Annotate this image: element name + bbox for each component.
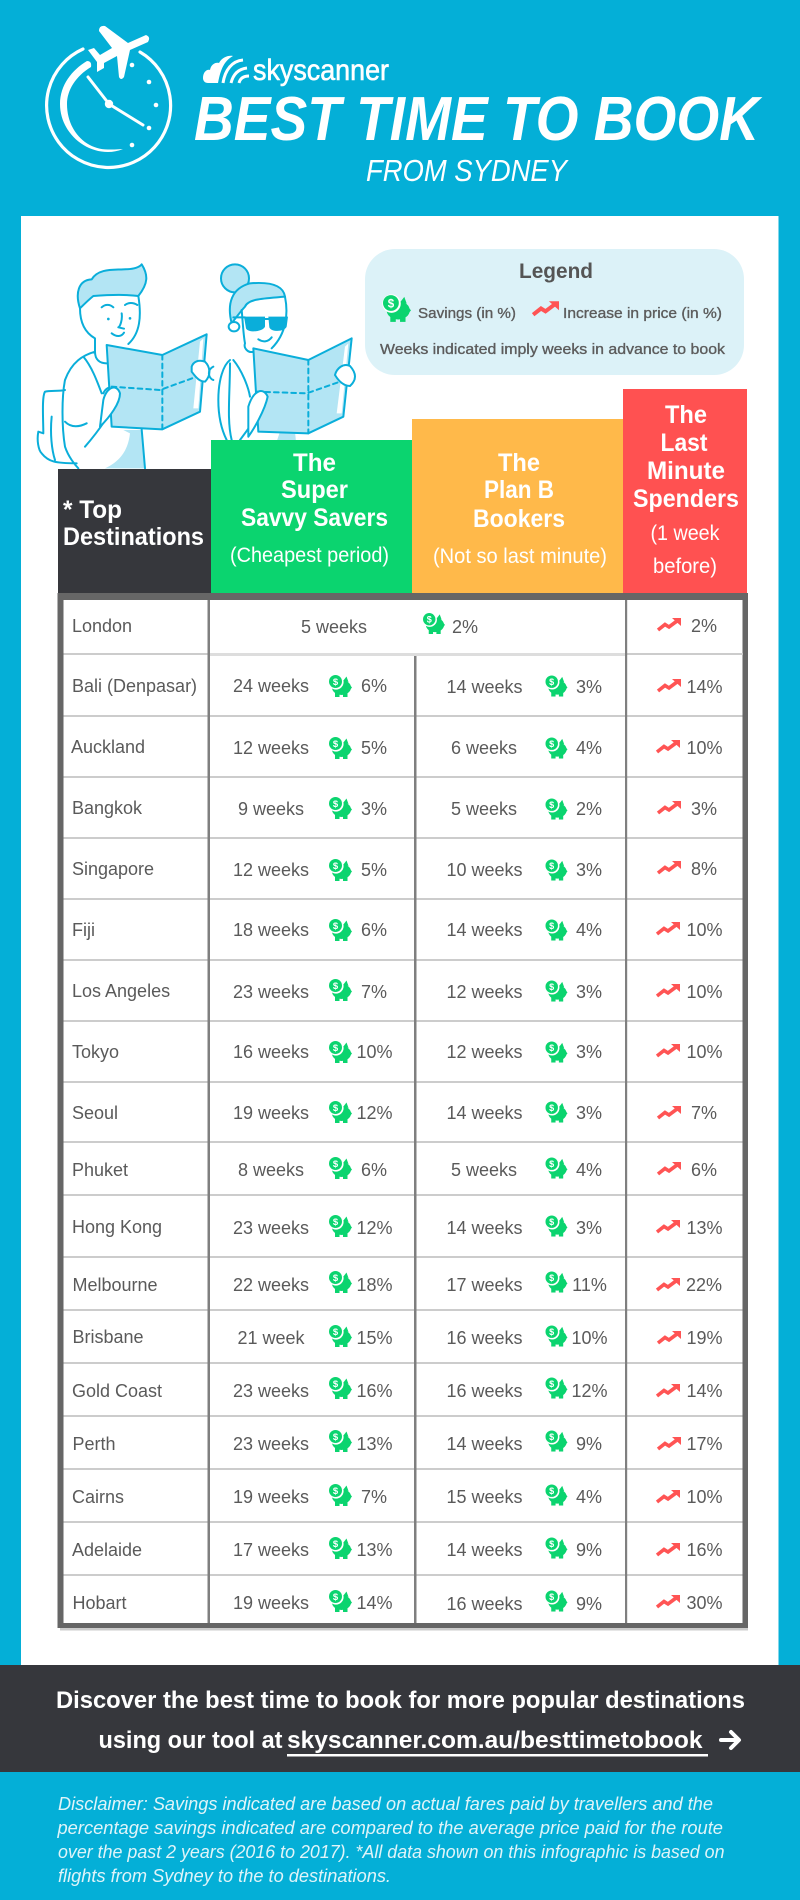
row: Adelaide (72, 1536, 723, 1560)
row: Fiji: 18 weeks (233, 920, 309, 940)
row: Cairns: 4% (576, 1487, 602, 1507)
row: Tokyo: 3% (576, 1042, 602, 1062)
disclaimer (56, 1794, 724, 1886)
row: Tokyo (72, 1040, 723, 1063)
row: Bangkok: 5 weeks (451, 799, 517, 819)
icon: clock with plane (47, 26, 171, 167)
disclaimer: percentage savings indicated are compared to the average price paid for the route (56, 1818, 723, 1838)
call to action band (0, 1665, 800, 1772)
column header: last minute spenders: before) (653, 555, 717, 578)
row: Phuket: Phuket (72, 1160, 128, 1180)
row: Los Angeles (72, 978, 723, 1002)
column header: super savvy savers: The (293, 449, 336, 477)
row: Brisbane: Brisbane (72, 1327, 144, 1347)
row: Brisbane: 10% (571, 1328, 608, 1348)
row: Gold Coast: 16% (356, 1381, 393, 1401)
row: Gold Coast (72, 1376, 723, 1401)
disclaimer: Disclaimer: Savings indicated are based on actual fares paid by travellers and the (58, 1794, 713, 1814)
row: Adelaide: 16% (686, 1540, 723, 1560)
row: Bali: 6% (361, 676, 387, 696)
row: Phuket: 6% (361, 1160, 387, 1180)
row: Gold Coast: 14% (686, 1381, 723, 1401)
column header: plan b bookers: (Not so last minute) (433, 545, 607, 568)
row: Melbourne: Melbourne (72, 1275, 158, 1295)
row: Melbourne: 11% (572, 1275, 607, 1295)
row: Auckland: 6 weeks (451, 738, 517, 758)
row: Perth: 23 weeks (233, 1434, 309, 1454)
skyscanner logo: skyscanner (253, 54, 389, 87)
row: Singapore: Singapore (72, 859, 154, 879)
row: Singapore: 8% (691, 859, 717, 879)
row: Melbourne: 17 weeks (446, 1275, 523, 1295)
row: Fiji: Fiji (72, 920, 95, 940)
row: Hobart: 16 weeks (446, 1594, 523, 1614)
row: Tokyo: 12 weeks (446, 1042, 523, 1062)
row: Melbourne (72, 1270, 722, 1295)
panel: white content card (21, 216, 778, 1665)
row: Phuket: 5 weeks (451, 1160, 517, 1180)
row: Hong Kong: Hong Kong (72, 1217, 162, 1237)
legend heading: Legend (519, 260, 593, 283)
row: Adelaide: 17 weeks (233, 1540, 309, 1560)
row: Bangkok (72, 796, 717, 820)
legend label: savings: Savings (in %) (418, 305, 516, 322)
icon: arrow (721, 1732, 739, 1748)
row: Melbourne: 18% (356, 1275, 393, 1295)
woman (209, 264, 355, 442)
row: Los Angeles: 12 weeks (446, 982, 523, 1002)
call to action line two: using our tool at (98, 1727, 283, 1754)
row: Tokyo: Tokyo (72, 1042, 119, 1062)
row: London: 2% (691, 616, 717, 636)
row: Adelaide: 9% (576, 1540, 602, 1560)
row: Cairns: 19 weeks (233, 1487, 309, 1507)
row: Bangkok: 9 weeks (238, 799, 304, 819)
row: Bali: 14 weeks (446, 677, 523, 697)
row: Cairns: 7% (361, 1487, 387, 1507)
row: Auckland: 5% (361, 738, 387, 758)
column header: last minute spenders: (1 week (650, 522, 720, 545)
row: Gold Coast: 12% (571, 1381, 608, 1401)
row: Melbourne: 22% (686, 1275, 722, 1295)
row: Fiji: 4% (576, 920, 602, 940)
row: Perth (72, 1429, 723, 1454)
column header: last minute spenders: The (665, 401, 707, 429)
row: Seoul: 3% (576, 1103, 602, 1123)
row: Gold Coast: 23 weeks (233, 1381, 309, 1401)
row: Auckland: Auckland (71, 737, 145, 757)
row: Bangkok: 2% (576, 799, 602, 819)
row: Singapore: 5% (361, 860, 387, 880)
column header: super savvy savers: Savvy Savers (241, 504, 388, 532)
row: Singapore: 12 weeks (233, 860, 309, 880)
row: Melbourne: 22 weeks (233, 1275, 309, 1295)
row: Tokyo: 16 weeks (233, 1042, 309, 1062)
column header: last minute spenders (623, 389, 747, 593)
row: Seoul: 14 weeks (446, 1103, 523, 1123)
row: Hobart: 9% (576, 1594, 602, 1614)
row: Auckland (71, 736, 723, 759)
row: Cairns: 10% (686, 1487, 723, 1507)
column header: top destinations: Destinations (63, 523, 204, 551)
call to action line one: Discover the best time to book for more popular destinations (56, 1687, 745, 1714)
disclaimer: over the past 2 years (2016 to 2017). *All data shown on this infographic is based on (58, 1842, 724, 1862)
row: Perth: 13% (356, 1434, 393, 1454)
row: Hong Kong: 3% (576, 1218, 602, 1238)
row: Brisbane: 21 week (237, 1328, 306, 1348)
row: Bali: 14% (686, 677, 723, 697)
row: Brisbane: 15% (356, 1328, 393, 1348)
row: Bangkok: 3% (361, 799, 387, 819)
row: Fiji (72, 918, 723, 941)
row: Hobart: Hobart (72, 1593, 127, 1613)
row: Auckland: 4% (576, 738, 602, 758)
row: Fiji: 14 weeks (446, 920, 523, 940)
column header: plan b bookers: The (498, 449, 540, 477)
row: Singapore: 3% (576, 860, 602, 880)
row: London: 2% (452, 617, 478, 637)
subtitle: FROM SYDNEY (366, 153, 569, 188)
row: Hong Kong (72, 1214, 723, 1238)
column header: last minute spenders: Last (660, 429, 708, 457)
row: Perth: 9% (576, 1434, 602, 1454)
row: Bali: 3% (576, 677, 602, 697)
row: Fiji: 10% (686, 920, 723, 940)
row: Brisbane (72, 1324, 723, 1348)
row: Adelaide: Adelaide (72, 1540, 142, 1560)
column header: last minute spenders: Minute (647, 457, 725, 485)
row: Perth: Perth (72, 1434, 116, 1454)
column header: super savvy savers: (Cheapest period) (230, 544, 389, 567)
row: Seoul: 19 weeks (233, 1103, 309, 1123)
legend label: price increase: Increase in price (in %) (563, 305, 722, 322)
disclaimer: flights from Sydney to the to destinations. (58, 1866, 391, 1886)
legend icon: price increase (533, 301, 559, 315)
row: Bangkok: 3% (691, 799, 717, 819)
column header: plan b bookers: Plan B (484, 476, 554, 504)
row: Perth: 14 weeks (446, 1434, 523, 1454)
row: Seoul: 7% (691, 1103, 717, 1123)
row: Hong Kong: 13% (686, 1218, 723, 1238)
row: Perth: 17% (686, 1434, 723, 1454)
row: Bali: Bali (Denpasar) (72, 676, 197, 696)
row: Hobart: 30% (686, 1593, 723, 1613)
row: Hong Kong: 12% (356, 1218, 393, 1238)
row: Hobart: 19 weeks (233, 1593, 309, 1613)
row: Hobart (72, 1589, 723, 1614)
illustration: two travellers reading maps (38, 264, 355, 468)
skyscanner logo (203, 54, 389, 87)
column header: last minute spenders: Spenders (633, 485, 739, 513)
row: Auckland: 10% (686, 738, 723, 758)
row: Bali (72, 674, 723, 697)
row: Hong Kong: 23 weeks (233, 1218, 309, 1238)
row: Cairns: 15 weeks (446, 1487, 523, 1507)
column header: super savvy savers: Super (281, 476, 348, 504)
row: Seoul: Seoul (72, 1103, 118, 1123)
column header: top destinations: * Top (63, 496, 122, 524)
row: Auckland: 12 weeks (233, 738, 309, 758)
legend note: Weeks indicated imply weeks in advance to book (380, 341, 726, 358)
column header: super savvy savers (211, 440, 412, 593)
row: Brisbane: 19% (686, 1328, 723, 1348)
row: Cairns: Cairns (72, 1487, 124, 1507)
row: Gold Coast: 16 weeks (446, 1381, 523, 1401)
column header: plan b bookers (412, 419, 623, 593)
row: Phuket: 6% (691, 1160, 717, 1180)
row: Adelaide: 14 weeks (446, 1540, 523, 1560)
column header: plan b bookers: Bookers (473, 505, 565, 533)
row: Los Angeles: 3% (576, 982, 602, 1002)
row: Phuket: 4% (576, 1160, 602, 1180)
row: London (72, 612, 717, 637)
row: Singapore: 10 weeks (446, 860, 523, 880)
row: Hong Kong: 14 weeks (446, 1218, 523, 1238)
legend icon: savings (382, 294, 411, 322)
table: booking times by destination (58, 593, 748, 1630)
row: Tokyo: 10% (356, 1042, 393, 1062)
link text: skyscanner.com.au/besttimetobook (287, 1727, 703, 1754)
row: Tokyo: 10% (686, 1042, 723, 1062)
row: London: 5 weeks (301, 617, 367, 637)
row: Bali: 24 weeks (233, 676, 309, 696)
row: Los Angeles: 7% (361, 982, 387, 1002)
row: Los Angeles: 10% (686, 982, 723, 1002)
row: Gold Coast: Gold Coast (72, 1381, 162, 1401)
row: London: London (72, 616, 132, 636)
row: Bangkok: Bangkok (72, 798, 143, 818)
row: Los Angeles: 23 weeks (233, 982, 309, 1002)
row: Phuket (72, 1156, 717, 1180)
row: Fiji: 6% (361, 920, 387, 940)
row: Cairns (72, 1483, 723, 1507)
row: Adelaide: 13% (356, 1540, 393, 1560)
row: Los Angeles: Los Angeles (72, 981, 170, 1001)
row: Singapore (72, 858, 717, 881)
column header: top destinations (58, 469, 211, 593)
row: Hobart: 14% (356, 1593, 393, 1613)
row: Seoul: 12% (356, 1103, 393, 1123)
man (38, 264, 209, 468)
row: Phuket: 8 weeks (238, 1160, 304, 1180)
row: Seoul (72, 1100, 717, 1123)
legend (365, 249, 744, 375)
row: Brisbane: 16 weeks (446, 1328, 523, 1348)
